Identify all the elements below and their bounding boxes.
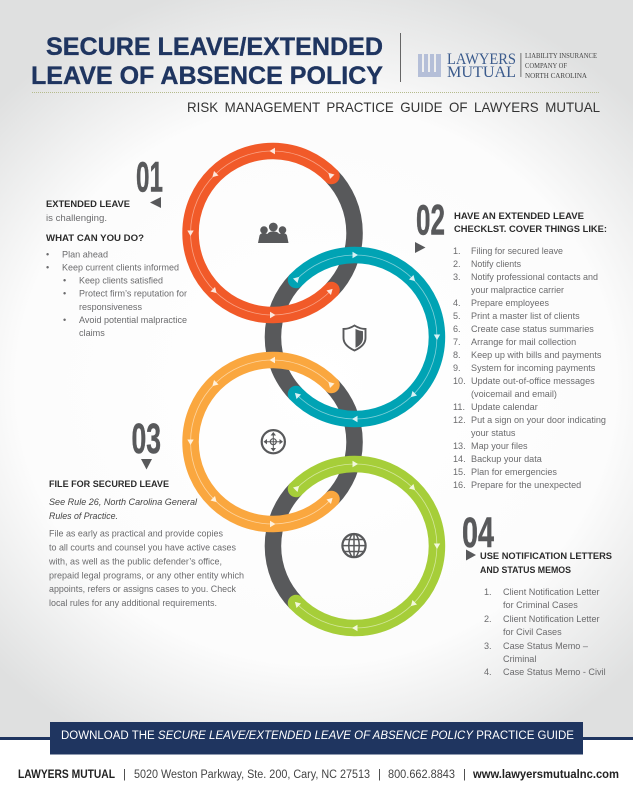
section 02: checklist: Keep up with bills and payments (471, 350, 602, 360)
section 04: document list: 1. (484, 587, 492, 597)
section 02: checklist: Update out-of-office messages (471, 376, 595, 386)
footer contact line: 800.662.8843 (388, 769, 455, 781)
footer contact line: | (378, 769, 381, 781)
section 03: number: 03 (132, 415, 161, 463)
section 04: document list: Client Notification Letter (503, 614, 600, 624)
section 01: text: Keep current clients informed (62, 262, 179, 272)
section 02: checklist: 10. (453, 376, 466, 386)
section 04: document list: for Criminal Cases (503, 600, 578, 610)
section 02: checklist: Print a master list of clients (471, 311, 580, 321)
section 03: text (48, 479, 244, 608)
logo: Lawyers Mutual: LIABILITY INSURANCE (525, 52, 597, 60)
section 02: checklist: 7. (453, 337, 461, 347)
section 03: text: See Rule 26, North Carolina General (49, 497, 198, 507)
section 01: text: Keep clients satisfied (79, 276, 163, 286)
section 02: checklist: 13. (453, 441, 466, 451)
subtitle: RISK MANAGEMENT PRACTICE GUIDE OF LAWYERS MUTUAL (187, 99, 600, 115)
section 04: document list: 2. (484, 614, 492, 624)
section 01: text: EXTENDED LEAVE (46, 199, 131, 210)
section 01: text: • (63, 288, 66, 298)
section 03: text: with, as well as the public defender’s office, (48, 556, 222, 566)
logo: Lawyers Mutual: LAWYERS (447, 51, 516, 68)
section 02: checklist: Prepare for the unexpected (471, 480, 581, 490)
section 02: checklist: 9. (453, 363, 461, 373)
section 02: checklist: 3. (453, 272, 461, 282)
section 02: checklist: 8. (453, 350, 461, 360)
section 02: checklist: Arrange for mail collection (471, 337, 576, 347)
section 02: checklist: Filing for secured leave (471, 246, 563, 256)
section 02: checklist: your status (471, 428, 516, 438)
section 03: text: to all courts and counsel you have active cases (49, 542, 236, 552)
section 02: checklist: Notify clients (471, 259, 521, 269)
section 02: checklist: Map your files (471, 441, 528, 451)
section 02: checklist: 6. (453, 324, 461, 334)
arrow: 01 left (150, 197, 161, 208)
section 02: checklist: 4. (453, 298, 461, 308)
section 03: text: local rules for any additional requirements. (49, 598, 217, 608)
arrow: 02 right (415, 242, 426, 253)
footer contact line: | (463, 769, 466, 781)
section 02: heading: CHECKLST. COVER THINGS LIKE: (454, 224, 607, 235)
section 04: number: 04 (462, 509, 494, 557)
section 02: number: 02 (416, 196, 445, 244)
section 02: checklist: Backup your data (471, 454, 543, 464)
icon: people (258, 223, 288, 243)
logo: Lawyers Mutual: COMPANY OF (525, 62, 567, 70)
section 02: checklist: 15. (453, 467, 466, 477)
logo: Lawyers Mutual: NORTH CAROLINA (525, 72, 587, 80)
section 02: checklist: 11. (453, 402, 465, 412)
section 02: checklist: Prepare employees (471, 298, 549, 308)
footer contact line: www.lawyersmutualnc.com (472, 769, 619, 781)
section 02: checklist: 14. (453, 454, 466, 464)
section 04: heading (480, 551, 613, 576)
section 02: checklist: Create case status summaries (471, 324, 594, 334)
ring 3: yellow (187, 357, 335, 527)
section 02: checklist: Plan for emergencies (471, 467, 557, 477)
section 02: checklist: your malpractice carrier (471, 285, 564, 295)
section 01: text: Plan ahead (62, 250, 108, 260)
section 04: document list: Case Status Memo - Civil (503, 667, 606, 677)
icon: compass (262, 430, 285, 453)
section 01: text (46, 199, 187, 338)
section 02: checklist: 5. (453, 311, 461, 321)
section 01: text: • (46, 250, 49, 260)
section 02: heading: HAVE AN EXTENDED LEAVE (454, 211, 585, 222)
section 01: text: • (63, 276, 66, 286)
section 03: text: File as early as practical and provide copies (49, 528, 223, 538)
dark ring segments (273, 176, 355, 603)
section 01: text: claims (79, 328, 105, 338)
section 03: text: appoints, refers or assigns cases to you. Check (49, 584, 236, 594)
section 01: text: Protect firm’s reputation for (79, 288, 187, 298)
section 02: checklist: 1. (453, 246, 461, 256)
section 04: heading: AND STATUS MEMOS (480, 565, 572, 576)
section 04: document list: 4. (484, 667, 492, 677)
section 03: text: FILE FOR SECURED LEAVE (49, 479, 170, 490)
title (31, 33, 383, 90)
section 02: checklist: Put a sign on your door indicating (471, 415, 606, 425)
section 01: text: Avoid potential malpractice (79, 315, 187, 325)
section 04: heading: USE NOTIFICATION LETTERS (480, 551, 613, 562)
section 02: checklist: (voicemail and email) (471, 389, 557, 399)
section 02: heading (454, 211, 607, 235)
section 02: checklist (453, 246, 606, 490)
section 03: text: prepaid legal programs, or any other entity which (49, 570, 244, 580)
section 04: document list: Case Status Memo – (503, 641, 589, 651)
section 01: text: responsiveness (79, 302, 142, 312)
section 04: document list: Client Notification Letter (503, 587, 600, 597)
section 02: checklist: Notify professional contacts and (471, 272, 598, 282)
arrow: 04 right (466, 550, 476, 560)
icon: shield (344, 326, 366, 350)
ring 4: green (293, 461, 440, 631)
section 01: text: WHAT CAN YOU DO? (46, 233, 144, 244)
section 01: text: • (46, 262, 49, 272)
section 04: document list: for Civil Cases (503, 627, 562, 637)
section 02: checklist: 16. (453, 480, 466, 490)
footer contact line: 5020 Weston Parkway, Ste. 200, Cary, NC 27513 (134, 769, 370, 781)
footer contact line: | (123, 769, 126, 781)
title: SECURE LEAVE/EXTENDED (46, 33, 383, 61)
ring 2: teal (293, 252, 440, 422)
section 02: checklist: Update calendar (471, 402, 538, 412)
download banner: DOWNLOAD THE SECURE LEAVE/EXTENDED LEAVE OF ABSENCE POLICY PRACTICE GUIDE (61, 730, 574, 742)
footer contact line (18, 769, 619, 781)
section 04: document list: Criminal (503, 654, 536, 664)
section 02: checklist: System for incoming payments (471, 363, 596, 373)
icon: globe (342, 534, 366, 557)
section 02: checklist: 12. (453, 415, 466, 425)
arrow: 03 down (141, 459, 152, 470)
section 03: text: Rules of Practice. (49, 511, 118, 521)
footer contact line: LAWYERS MUTUAL (18, 769, 115, 781)
download banner (50, 722, 583, 754)
section 01: text: is challenging. (46, 213, 107, 223)
section 04: document list (484, 587, 606, 677)
logo: Lawyers Mutual (418, 51, 597, 81)
section 01: number: 01 (136, 154, 163, 202)
section 04: document list: 3. (484, 641, 492, 651)
section 02: checklist: 2. (453, 259, 461, 269)
section 01: text: • (63, 315, 66, 325)
ring 1: orange (187, 148, 335, 318)
title: LEAVE OF ABSENCE POLICY (31, 62, 383, 90)
logo: Lawyers Mutual: MUTUAL (447, 64, 516, 81)
